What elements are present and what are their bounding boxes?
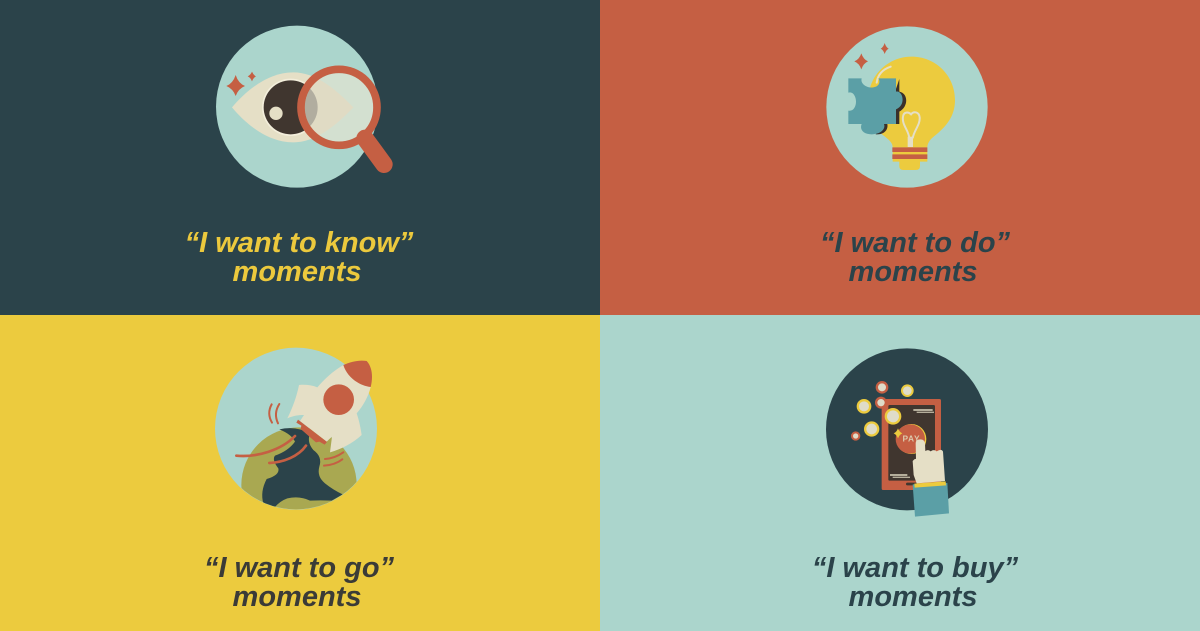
heading: I want to do moments: “I want to do” — [820, 227, 1011, 259]
panel: I want to buy — [600, 315, 1200, 631]
heading: I want to know moments: “I want to know” — [185, 227, 414, 259]
heading: I want to buy moments: moments — [849, 581, 977, 613]
panel: I want to go — [0, 315, 600, 631]
panel: I want to know — [0, 0, 600, 315]
heading: I want to buy moments: “I want to buy” — [812, 552, 1019, 584]
icon: light bulb and puzzle piece — [826, 26, 988, 188]
coins — [851, 381, 914, 441]
heading: I want to go moments: “I want to go” — [204, 552, 395, 584]
icon: phone payment with coins — [826, 348, 988, 517]
heading: I want to go moments: moments — [233, 581, 361, 613]
icon: eye and magnifying glass — [216, 26, 384, 188]
icon: rocket leaving earth — [215, 348, 377, 510]
panel: I want to do — [600, 0, 1200, 315]
pay label: PAY — [902, 433, 920, 443]
heading: I want to do moments: moments — [849, 256, 977, 288]
heading: I want to know moments: moments — [233, 256, 361, 288]
